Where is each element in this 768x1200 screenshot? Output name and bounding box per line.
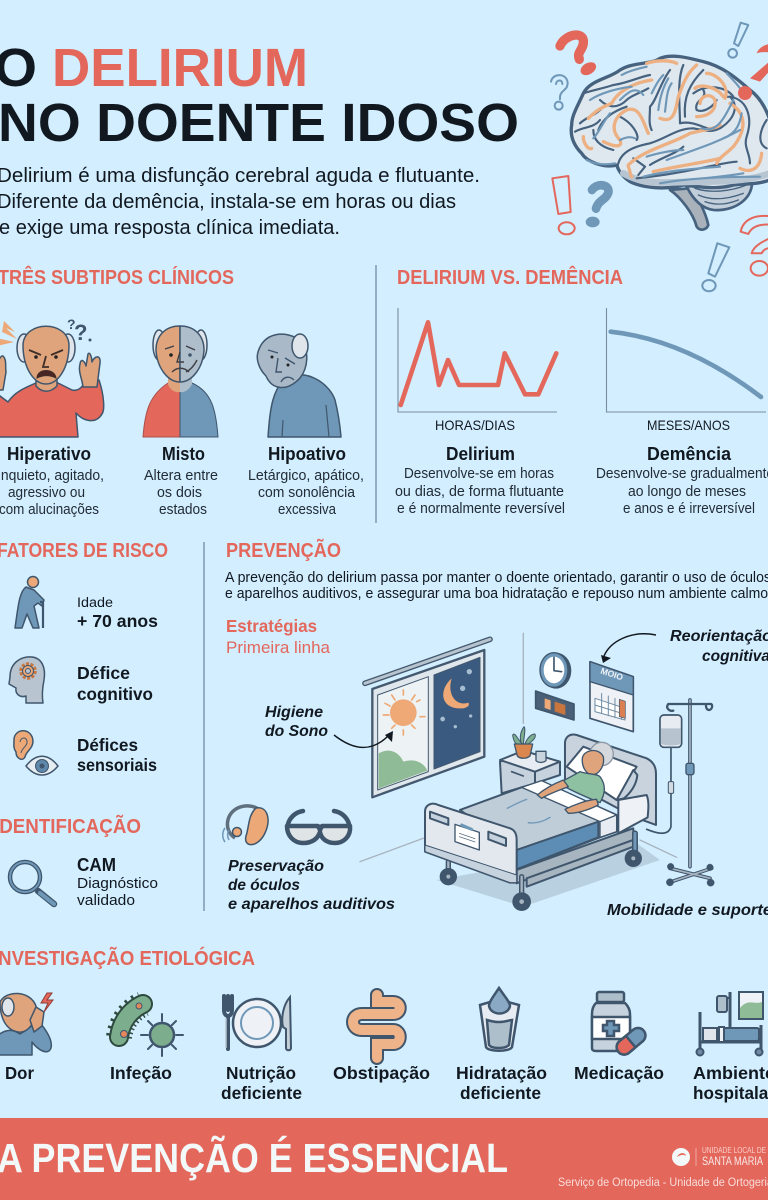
icon: hearing aid <box>223 806 268 845</box>
label: Delirium <box>395 444 565 517</box>
intro text: e exige uma resposta clínica imediata. <box>0 217 340 239</box>
icon labels: Hidratação <box>456 1063 547 1083</box>
icon labels: Dor <box>5 1063 34 1083</box>
illustration: brain with question marks <box>551 23 768 291</box>
label: Hipoativo: Letárgico, apático, <box>248 468 364 484</box>
icon labels: Obstipação <box>333 1063 430 1083</box>
red dot of question mark <box>738 86 752 100</box>
label: Demência: Demência <box>647 444 732 464</box>
subheading <box>226 616 331 657</box>
icon: hospital room <box>696 992 763 1056</box>
brain stem and cerebellum <box>670 178 752 230</box>
label: Hiperativo: Inquieto, agitado, <box>0 468 104 484</box>
axis labels <box>435 417 730 433</box>
panel: etiological investigation <box>0 946 768 1103</box>
callout: Preservação: de óculos <box>228 877 300 894</box>
icon: head with gear <box>9 657 44 703</box>
text: Défice cognitivo: Défice <box>77 663 130 683</box>
intro text: Diferente da demência, instala-se em horas ou dias <box>0 191 456 213</box>
label: Demência <box>596 444 768 517</box>
heading: FATORES DE RISCO <box>0 540 168 562</box>
title: NO DOENTE IDOSO <box>0 93 519 153</box>
callout: Reorientação cognitiva <box>601 628 768 665</box>
label: Demência: e anos e é irreversível <box>623 501 755 517</box>
title: DELIRIUM <box>52 38 308 98</box>
axis labels: MESES/ANOS <box>647 417 730 433</box>
heading: TRÊS SUBTIPOS CLÍNICOS <box>0 265 234 289</box>
text block <box>225 569 768 602</box>
chart: dementia <box>606 308 766 412</box>
subheading: Primeira linha <box>226 639 331 657</box>
icon labels: Infeção <box>110 1063 172 1083</box>
label: Hiperativo: Hiperativo <box>7 444 91 464</box>
callout: Preservação <box>228 858 395 913</box>
icon: pain <box>0 993 53 1055</box>
callout: Preservação: e aparelhos auditivos <box>228 896 395 913</box>
panel: prevention <box>223 539 768 919</box>
icon labels: deficiente <box>460 1083 541 1103</box>
callout: Higiene do Sono <box>265 704 393 747</box>
label: Delirium: ou dias, de forma flutuante <box>395 484 564 500</box>
intro text: Delirium é uma disfunção cerebral aguda e flutuante. <box>0 165 480 187</box>
figure: hyperactive patient: ? <box>74 320 87 345</box>
bed, patient and nightstand <box>425 727 656 910</box>
label: Hipoativo: Hipoativo <box>268 444 346 464</box>
callout: Reorientação cognitiva: Reorientação <box>670 628 768 645</box>
window, clock and calendar: MOIO <box>599 666 625 682</box>
heading: INVESTIGAÇÃO ETIOLÓGICA <box>0 946 255 970</box>
icon: glasses <box>287 811 350 843</box>
label: Hipoativo: excessiva <box>278 502 337 518</box>
text: Défice cognitivo <box>77 663 153 704</box>
icon labels: deficiente <box>221 1083 302 1103</box>
icon: hydration <box>480 988 519 1051</box>
heading: DELIRIUM VS. DEMÊNCIA <box>397 265 623 289</box>
figure: mixed patient <box>143 326 218 437</box>
floating question and exclamation marks <box>551 23 768 291</box>
figure: hyperactive patient <box>0 316 104 437</box>
icon: infection <box>119 1003 183 1056</box>
text: Défice cognitivo: cognitivo <box>77 684 153 704</box>
figure: hyperactive patient: ? <box>67 316 76 332</box>
label: Hipoativo: com sonolência <box>258 485 356 501</box>
text: Défices sensoriais: Défices <box>77 735 138 755</box>
footer banner <box>0 1118 768 1200</box>
panel: delirium vs dementia <box>395 265 768 517</box>
icon: intestine <box>353 995 400 1058</box>
chart: delirium <box>398 308 557 412</box>
icon: elderly with cane <box>15 576 44 628</box>
divider <box>204 265 376 911</box>
brain cerebrum <box>571 56 768 188</box>
icon: magnifier <box>10 862 54 904</box>
text: Idade <box>77 595 158 631</box>
label: Delirium: Desenvolve-se em horas <box>404 466 554 482</box>
text: Défices sensoriais: sensoriais <box>77 755 157 775</box>
icon labels <box>5 1063 768 1103</box>
label: Misto: os dois <box>157 485 202 501</box>
label: Delirium: e é normalmente reversível <box>397 501 565 517</box>
callout: Mobilidade: Mobilidade e suporte <box>607 902 768 919</box>
window, clock and calendar <box>360 633 714 907</box>
logo <box>672 1146 766 1168</box>
slogan: A PREVENÇÃO É ESSENCIAL <box>0 1135 508 1181</box>
arrow <box>334 731 393 747</box>
intro text <box>0 165 480 239</box>
text: Idade: + 70 anos <box>77 611 158 631</box>
label: Hiperativo <box>0 444 104 518</box>
label: Misto <box>144 444 218 518</box>
text: Idade: Idade <box>77 595 113 610</box>
text: CAM <box>77 855 158 909</box>
icon labels: Medicação <box>574 1063 664 1083</box>
label: Hiperativo: agressivo ou <box>8 485 85 501</box>
label: Hiperativo: com alucinações <box>0 502 99 518</box>
icon: plate and cutlery <box>224 996 291 1050</box>
heading: PREVENÇÃO <box>226 539 341 562</box>
label: Misto: Misto <box>162 444 205 464</box>
icon: medication <box>592 992 649 1058</box>
panel: subtypes <box>0 265 364 518</box>
subheading: Estratégias <box>226 616 317 636</box>
illustration: hospital room <box>360 633 714 910</box>
title <box>0 38 519 153</box>
label: Misto: estados <box>159 502 207 518</box>
figure: hypoactive patient <box>257 334 341 437</box>
text: CAM: Diagnóstico <box>77 875 158 892</box>
callout: Preservação: Preservação <box>228 858 324 875</box>
label: Hipoativo <box>248 444 364 518</box>
callout: Higiene do Sono: do Sono <box>265 723 328 740</box>
callout: Higiene do Sono: Higiene <box>265 704 323 721</box>
panel: risk factors <box>0 540 168 775</box>
text: Défices sensoriais <box>77 735 157 775</box>
axis labels: HORAS/DIAS <box>435 417 515 433</box>
text: CAM: CAM <box>77 855 116 875</box>
label: Demência: ao longo de meses <box>628 484 746 500</box>
label: Misto: Altera entre <box>144 468 218 484</box>
panel: identification <box>0 815 158 909</box>
text: CAM: validado <box>77 892 135 909</box>
arrow <box>601 634 656 663</box>
icon labels: Nutrição <box>226 1063 296 1083</box>
label: Delirium: Delirium <box>446 444 515 464</box>
icon: ear and eye <box>14 731 58 775</box>
